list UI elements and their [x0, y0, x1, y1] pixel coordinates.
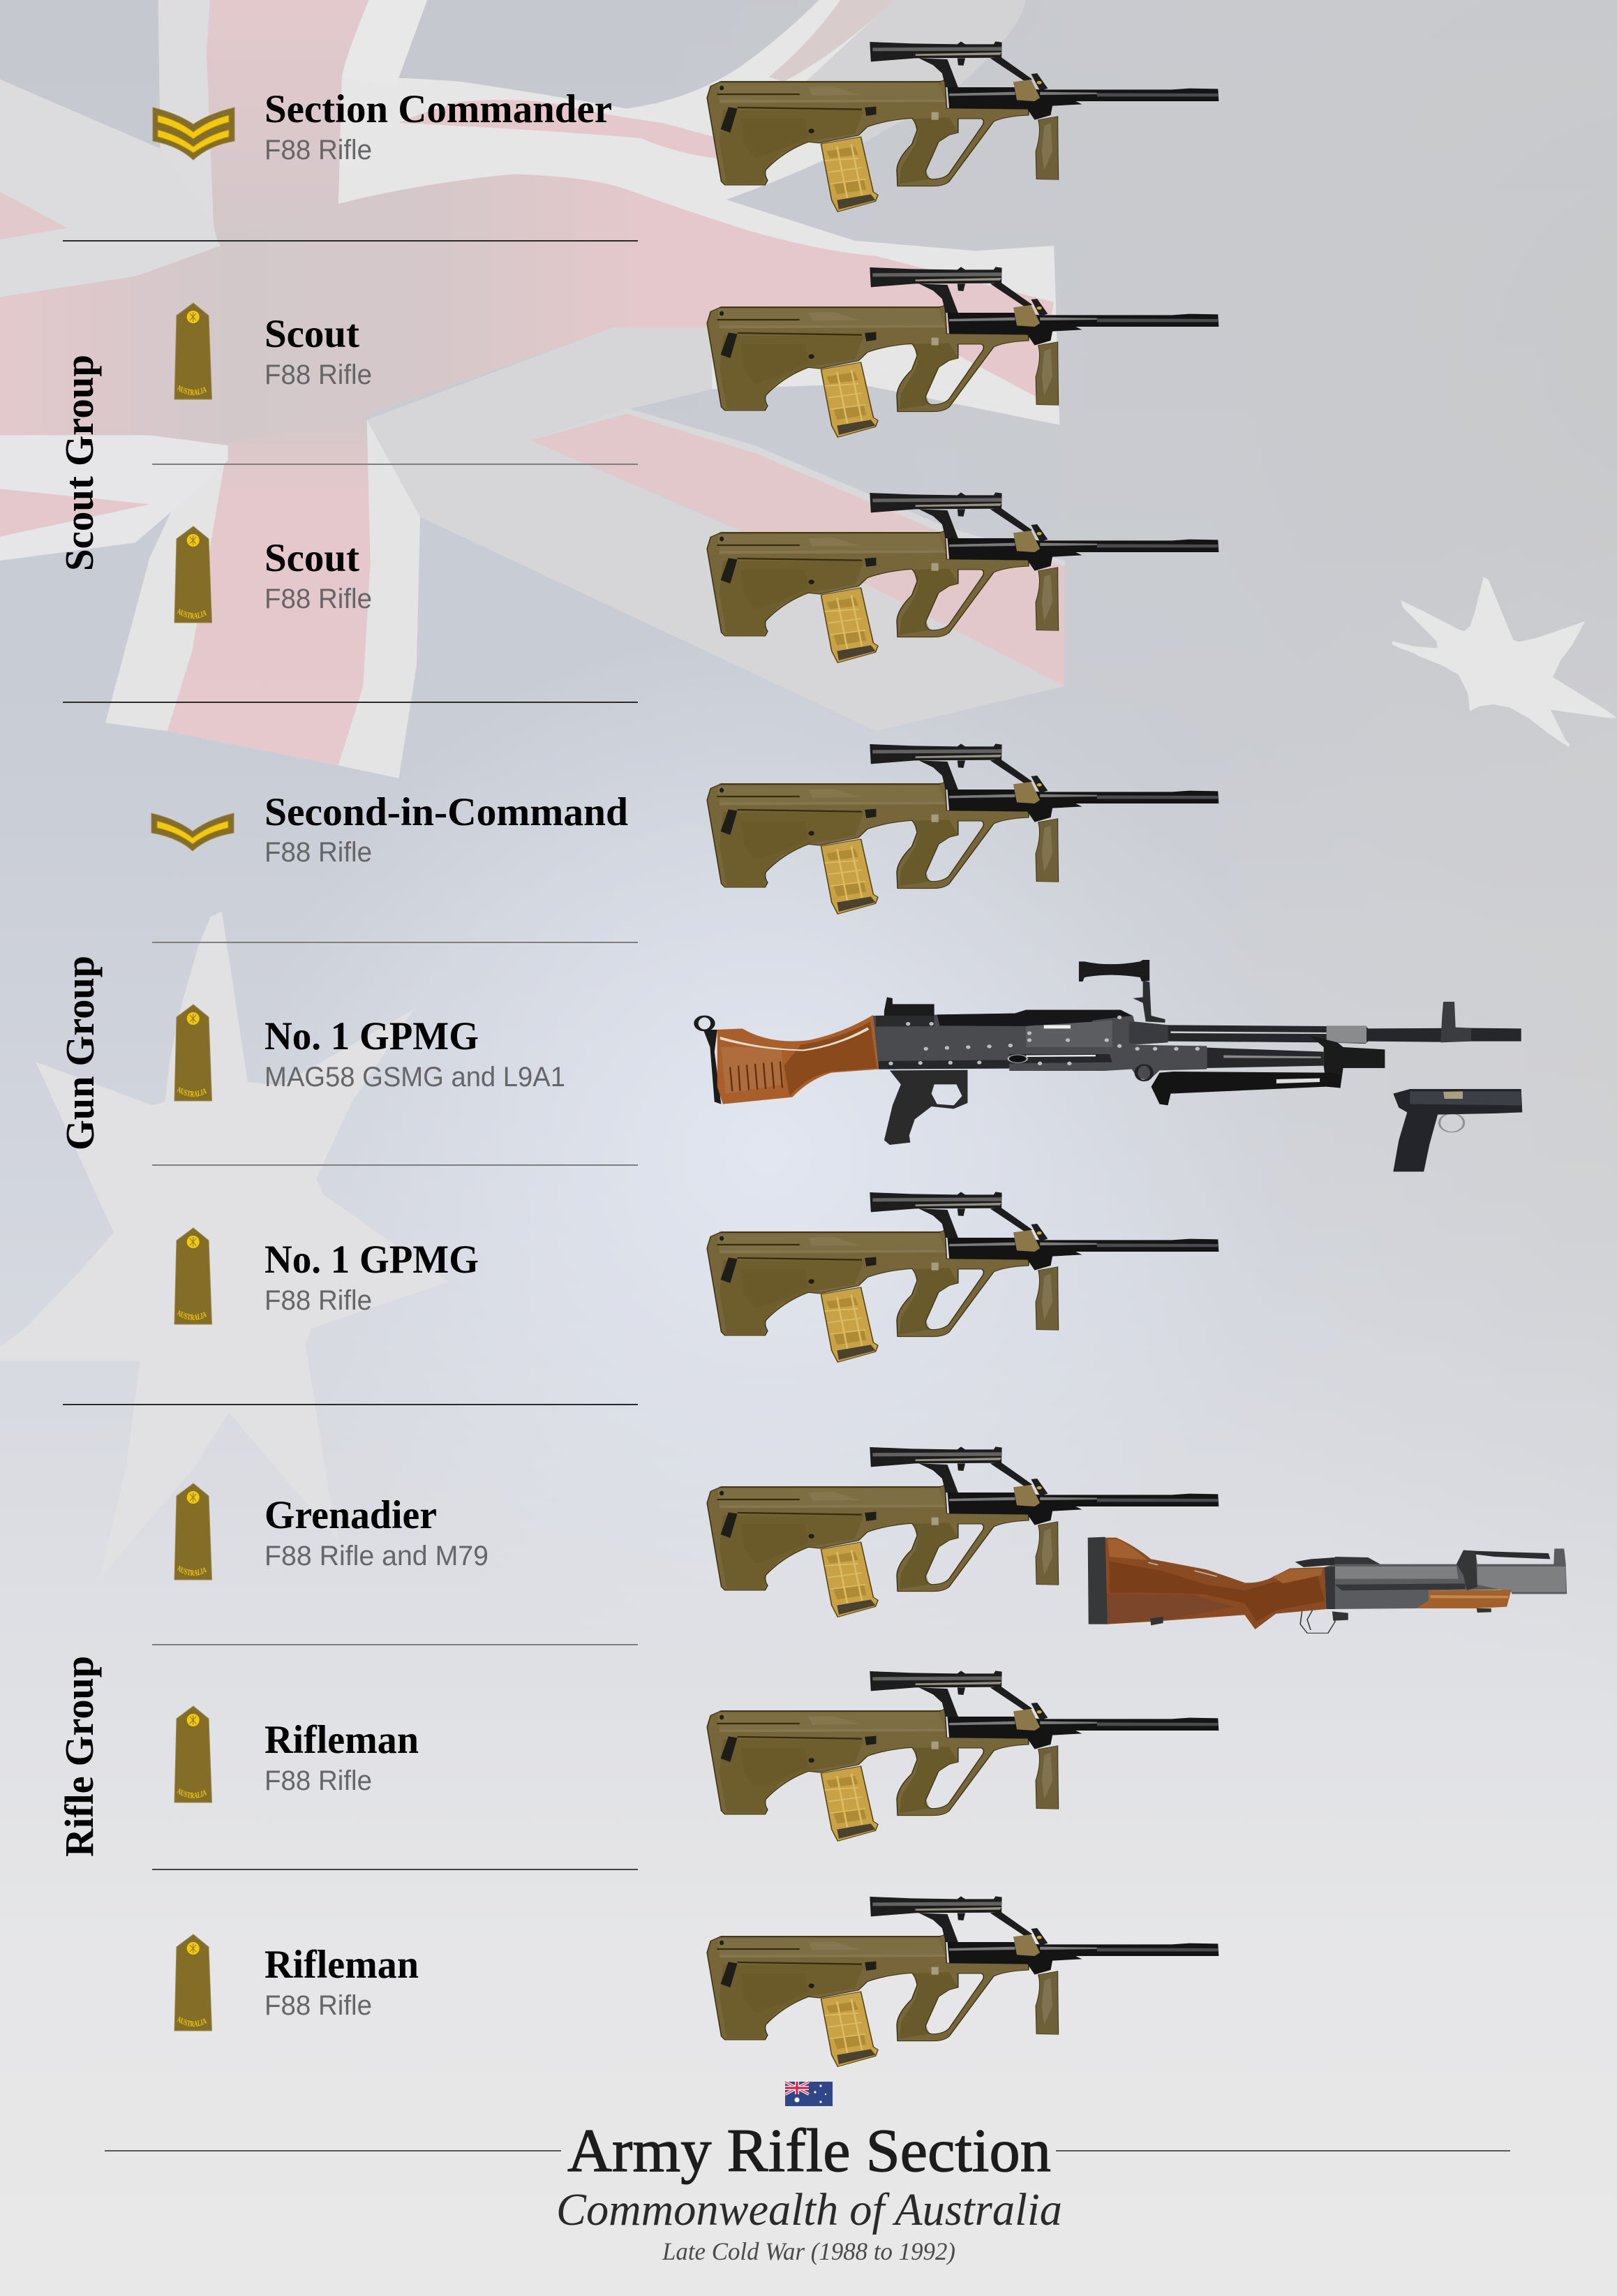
insignia: rank slide: AUSTRALIA — [177, 1566, 207, 1576]
weapon label: F88 Rifle and M79 — [264, 1541, 489, 1571]
weapon label: F88 Rifle — [264, 1765, 372, 1796]
title rule left — [105, 2150, 561, 2151]
weapon label: F88 Rifle — [264, 837, 372, 868]
background flag: union jack — [0, 0, 1064, 778]
insignia: single chevron — [151, 813, 234, 851]
weapon label: F88 Rifle — [264, 1285, 372, 1316]
row: Scout 1 — [174, 267, 1219, 438]
background flag: right star — [1392, 577, 1617, 747]
weapon: F88 rifle — [707, 1671, 1219, 1841]
row: Grenadier — [174, 1446, 1567, 1634]
title rule right — [1056, 2150, 1510, 2151]
weapon label: F88 Rifle — [264, 584, 372, 614]
background flag: large commonwealth star — [0, 912, 449, 1578]
insignia: rank slide: AUSTRALIA — [177, 1310, 207, 1321]
insignia: rank slide — [174, 1483, 212, 1580]
name: No. 1 GPMG — [264, 1238, 479, 1282]
weapon label: F88 Rifle — [264, 135, 372, 165]
row: No. 1 GPMG (machine gun) — [174, 960, 1523, 1171]
row: Section Commander — [153, 41, 1219, 212]
insignia: rank slide — [174, 1934, 212, 2031]
row: Scout 2 — [174, 492, 1219, 663]
group label: Rifle Group: Rifle Group — [57, 1656, 102, 1857]
weapon: F88 rifle — [707, 1192, 1219, 1362]
group label: Gun Group: Gun Group — [57, 956, 103, 1150]
name: Second-in-Command — [264, 790, 628, 834]
name: Section Commander — [264, 87, 612, 131]
weapon label: MAG58 GSMG and L9A1 — [264, 1062, 565, 1093]
weapon: F88 rifle — [707, 492, 1219, 662]
insignia: corporal double chevron — [153, 108, 234, 160]
name: Rifleman — [264, 1718, 419, 1762]
weapon label: F88 Rifle — [264, 1990, 372, 2021]
weapon label: F88 Rifle — [264, 360, 372, 390]
weapon: F88 rifle — [707, 41, 1219, 212]
row: No. 1 GPMG (rifle) — [174, 1192, 1219, 1363]
group label: Scout Group: Scout Group — [57, 355, 102, 571]
insignia: rank slide — [174, 1706, 212, 1802]
insignia: rank slide — [174, 1004, 212, 1102]
insignia: rank slide — [174, 303, 212, 399]
weapon: F88 rifle — [707, 267, 1219, 437]
icon: Australian flag — [785, 2082, 833, 2106]
name: Grenadier — [264, 1493, 437, 1537]
title: Army Rifle Section — [567, 2117, 1051, 2185]
name: Rifleman — [264, 1943, 419, 1987]
row: Rifleman 1 — [174, 1671, 1219, 1842]
subtitle: Commonwealth of Australia — [556, 2184, 1062, 2235]
name: Scout — [264, 536, 359, 580]
period line: Late Cold War (1988 to 1992) — [662, 2237, 955, 2265]
insignia: rank slide: AUSTRALIA — [177, 2017, 207, 2027]
insignia: rank slide: AUSTRALIA — [177, 1087, 207, 1097]
insignia: rank slide: AUSTRALIA — [177, 609, 207, 619]
weapon: F88 rifle — [707, 743, 1219, 914]
row: Second-in-Command — [151, 743, 1219, 914]
weapon: M79 grenade launcher — [1088, 1537, 1567, 1633]
weapon: MAG58 machine gun and L9A1 pistol — [696, 960, 1522, 1171]
row: Rifleman 2 — [174, 1896, 1219, 2067]
weapon: F88 rifle — [707, 1896, 1219, 2066]
name: Scout — [264, 312, 359, 356]
insignia: rank slide — [174, 1227, 212, 1325]
insignia: rank slide: AUSTRALIA — [177, 1788, 207, 1798]
weapon: F88 rifle — [707, 1446, 1219, 1617]
insignia: rank slide: AUSTRALIA — [177, 385, 207, 395]
insignia: rank slide — [174, 526, 212, 623]
name: No. 1 GPMG — [264, 1014, 479, 1058]
